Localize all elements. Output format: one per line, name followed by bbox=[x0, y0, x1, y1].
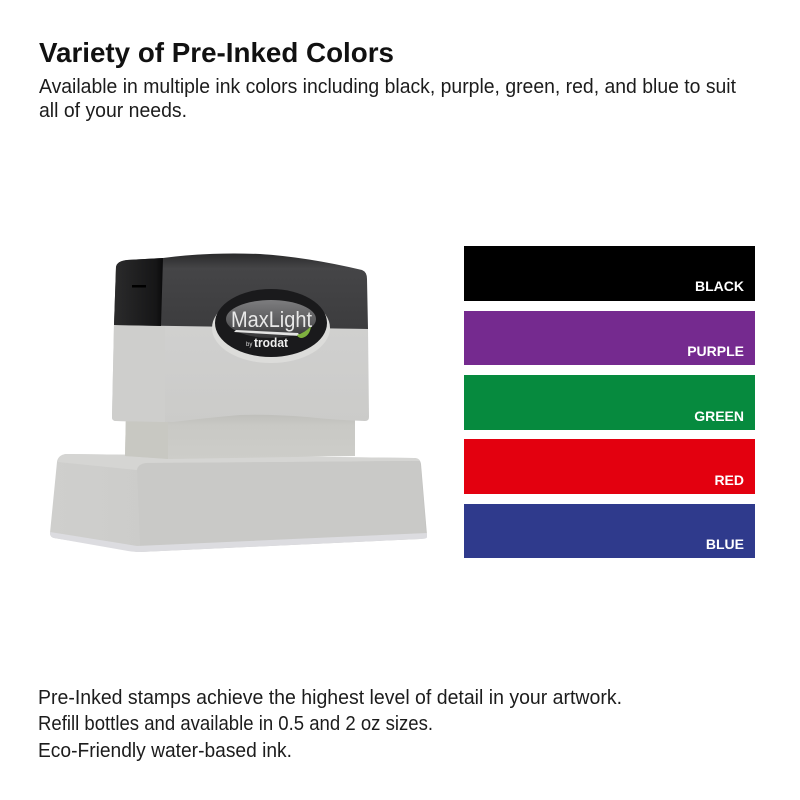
intro text: all of your needs. bbox=[39, 100, 187, 122]
footer text: Refill bottles and available in 0.5 and 2 oz sizes. bbox=[38, 713, 433, 735]
swatch: black bbox=[464, 246, 755, 301]
swatch: green bbox=[464, 375, 755, 430]
swatch: blue: BLUE bbox=[706, 536, 744, 552]
footer text: Eco-Friendly water-based ink. bbox=[38, 740, 292, 762]
swatch: purple: PURPLE bbox=[687, 343, 744, 359]
swatch: purple bbox=[464, 311, 755, 365]
intro text: Available in multiple ink colors including black, purple, green, red, and blue to suit bbox=[39, 76, 736, 98]
logo badge: by bbox=[246, 342, 252, 348]
swatch: blue bbox=[464, 504, 755, 558]
color swatches bbox=[464, 246, 755, 558]
stamp grey body bbox=[112, 324, 369, 422]
footer text bbox=[38, 687, 622, 762]
swatch: green: GREEN bbox=[694, 408, 744, 424]
title: Variety of Pre-Inked Colors bbox=[39, 37, 394, 68]
logo badge: MaxLight bbox=[231, 307, 312, 332]
footer text: Pre-Inked stamps achieve the highest level of detail in your artwork. bbox=[38, 687, 622, 709]
stamp neck bbox=[125, 412, 355, 459]
stamp illustration bbox=[50, 254, 427, 552]
swatch: black: BLACK bbox=[695, 278, 744, 294]
swatch: red: RED bbox=[714, 472, 744, 488]
intro text bbox=[39, 76, 736, 122]
swatch: red bbox=[464, 439, 755, 494]
stamp black cap bbox=[114, 254, 368, 329]
logo badge bbox=[212, 289, 330, 363]
stamp base bbox=[50, 454, 427, 552]
logo badge: trodat bbox=[254, 335, 289, 350]
